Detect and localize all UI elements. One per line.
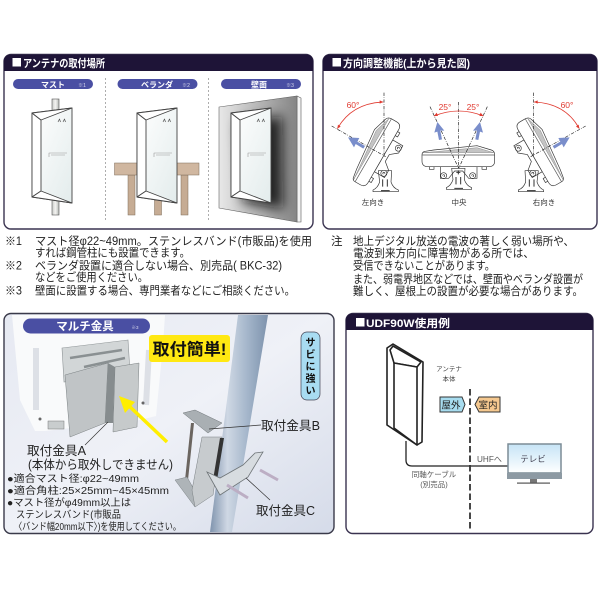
pill: wall: 壁面	[251, 80, 267, 90]
cable line	[406, 441, 508, 466]
label: 25 degrees left: 25°	[439, 102, 451, 112]
photo: mounting bracket A	[48, 340, 139, 437]
text block: caution note: 注	[331, 235, 343, 248]
pill: mast	[13, 79, 93, 90]
panel: UDF90W usage example	[346, 314, 593, 534]
text block: specifications: ●適合角柱:25×25mm~45×45mm	[7, 484, 169, 497]
badge: rust resistant	[301, 332, 320, 400]
heading: direction adjustment: 方向調整機能(上から見た図)	[343, 56, 470, 70]
text block: specifications: 〈バンド幅20mm以下〉)を使用してください。	[14, 520, 181, 533]
label: facing left: 左向き	[362, 197, 384, 207]
label: bracket A: 取付金具A	[27, 444, 87, 458]
badge: rust resistant: い	[306, 386, 316, 397]
panel: direction adjustment	[323, 54, 597, 229]
leader lines	[85, 422, 270, 500]
label: antenna body: アンテナ	[436, 365, 462, 373]
badge: rust resistant: に	[306, 361, 316, 373]
diagram: facing right	[505, 93, 586, 194]
label: bracket A	[27, 444, 173, 472]
text block: caution note: 電波到来方向に障害物がある所では、	[353, 246, 534, 260]
pill: veranda	[118, 79, 198, 90]
panel: multi bracket photo	[4, 314, 334, 534]
tag: outdoor: 屋外	[441, 400, 461, 412]
photo: antenna rear	[12, 315, 165, 431]
pill: mast: マスト	[41, 80, 65, 90]
diagram: center	[422, 102, 495, 189]
text block: footnotes: マスト径φ22~49mm。ステンレスバンド(市販品)を使用	[35, 234, 312, 248]
heading: mounting locations: アンテナの取付場所	[23, 56, 105, 70]
illustration: antenna on veranda	[114, 108, 199, 215]
label: 25 degrees right: 25°	[467, 102, 479, 112]
text block: caution note: 地上デジタル放送の電波の著しく弱い場所や、	[353, 234, 574, 248]
illustration: television: テレビ	[520, 454, 546, 464]
heading: usage example	[346, 314, 593, 330]
text block: specifications	[7, 472, 181, 533]
arrow: yellow	[119, 396, 167, 442]
text block: footnotes: 壁面に設置する場合、専門業者などにご相談ください。	[35, 284, 295, 298]
tag: outdoor	[440, 397, 465, 412]
tag: indoor: 室内	[478, 400, 498, 412]
text block: footnotes: すれば鋼管柱にも設置できます。	[35, 246, 190, 260]
label: antenna body	[436, 365, 462, 383]
text block: footnotes: ※1	[5, 236, 22, 248]
pill: veranda: ※2	[182, 83, 190, 89]
text block: footnotes: などをご使用ください。	[35, 270, 148, 284]
text block: specifications: ステンレスバンド(市販品	[16, 508, 121, 521]
text block: footnotes: ベランダ設置に適合しない場合、別売品( BKC-32)	[35, 258, 282, 272]
label: coaxial cable	[412, 469, 457, 489]
badge: rust resistant: 強	[306, 373, 316, 385]
heading: usage example: UDF90W使用例	[366, 316, 450, 330]
badge: rust resistant: サ	[306, 337, 316, 349]
text block: specifications: ●適合マスト径:φ22~49mm	[7, 472, 139, 485]
panel: mounting locations	[4, 54, 313, 229]
text block: caution note: 難しく、屋根上の設置が必要な場合があります。	[353, 284, 583, 298]
illustration: antenna on wall	[219, 96, 301, 222]
label: 60 degrees right: 60°	[561, 100, 573, 110]
text block: footnotes: ※2	[5, 260, 22, 272]
pill: wall: ※3	[286, 83, 294, 89]
illustration: antenna body	[387, 344, 423, 445]
diagram: facing left	[332, 93, 412, 194]
label: center: 中央	[452, 197, 467, 207]
photo: mast	[210, 315, 268, 532]
illustration: television	[507, 444, 562, 484]
label: bracket C: 取付金具C	[256, 504, 315, 518]
badge: multi bracket	[23, 318, 150, 334]
text block: caution note	[331, 234, 583, 298]
text block: footnotes	[5, 234, 312, 298]
heading: mounting locations	[4, 54, 313, 71]
text block: caution note: 受信できないことがあります。	[353, 258, 495, 272]
label: bracket B: 取付金具B	[261, 419, 320, 433]
badge: multi bracket: マルチ金具	[56, 319, 114, 333]
badge: multi bracket: ※3	[131, 325, 139, 330]
photo: mounting bracket B and C	[175, 410, 278, 507]
text block: specifications: ●マスト径がφ49mm以上は	[7, 496, 131, 509]
label: UHF: UHFへ	[477, 455, 502, 464]
label: bracket A: (本体から取外しできません)	[28, 458, 173, 472]
label: coaxial cable: 同軸ケーブル	[412, 469, 457, 479]
pill: wall	[221, 79, 301, 90]
label: 60 degrees left: 60°	[347, 100, 359, 110]
heading: direction adjustment	[323, 54, 597, 71]
badge: rust resistant: ビ	[306, 348, 316, 361]
callout: easy mounting: 取付簡単!	[152, 339, 226, 359]
pill: veranda: ベランダ	[141, 80, 173, 90]
text block: footnotes: ※3	[5, 286, 22, 298]
illustration: antenna on mast	[32, 99, 72, 215]
label: facing right: 右向き	[533, 197, 555, 207]
divider: indoor outdoor	[469, 389, 471, 529]
tag: indoor	[475, 397, 500, 412]
callout: easy mounting	[149, 335, 230, 362]
label: antenna body: 本体	[442, 374, 456, 383]
pill: mast: ※1	[78, 83, 86, 89]
label: coaxial cable: (別売品)	[420, 479, 448, 489]
